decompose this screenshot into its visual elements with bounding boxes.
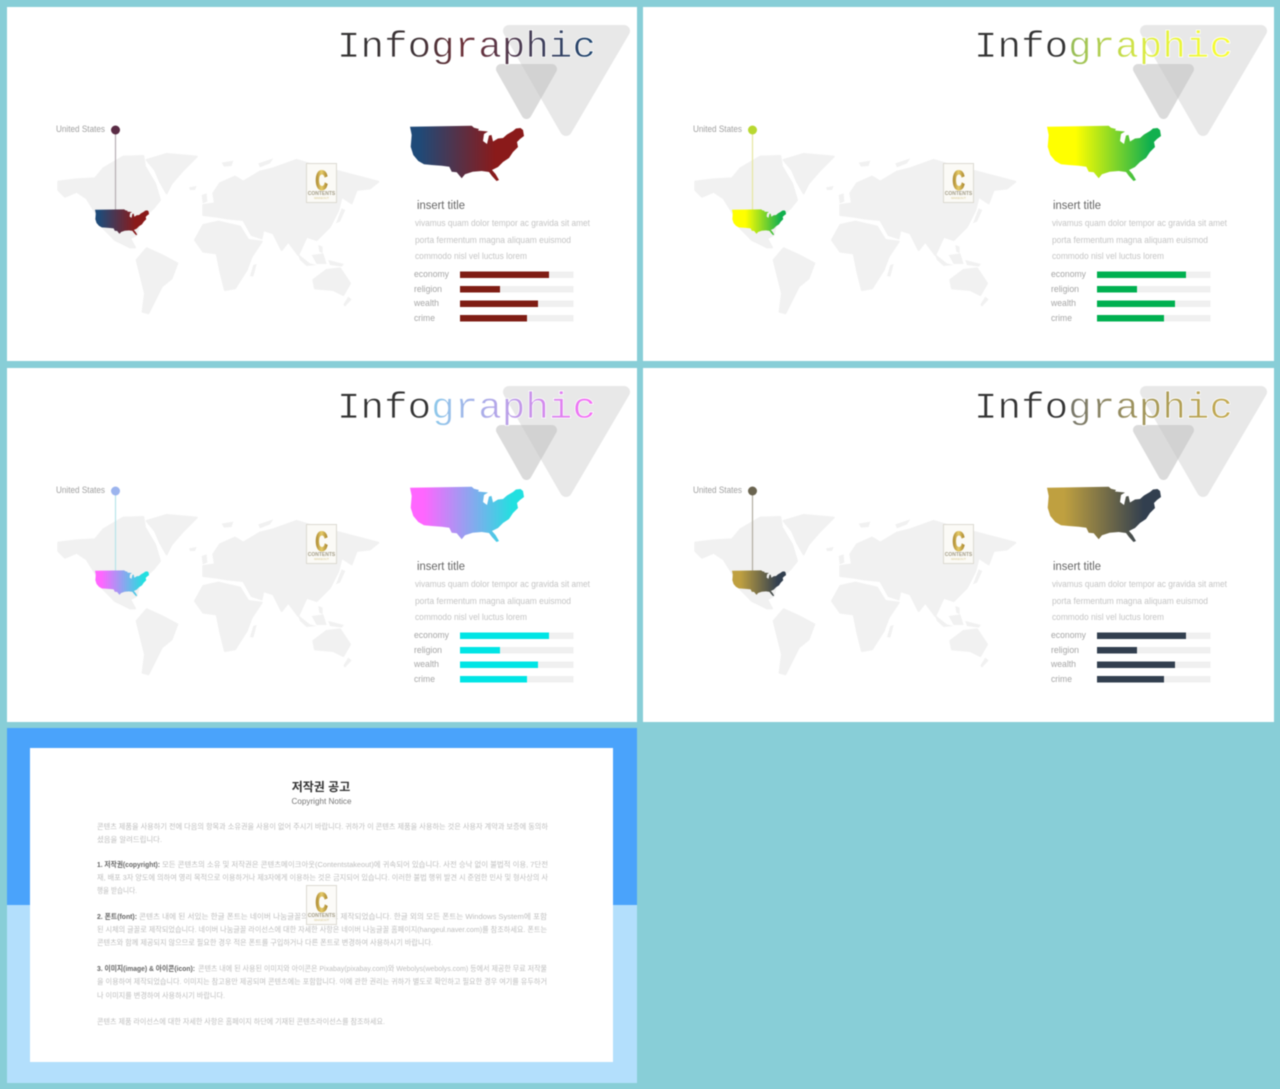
- bar chart: religion: [414, 284, 442, 295]
- subheading: Copyright Notice: [292, 796, 352, 806]
- bar chart: economy: [1051, 630, 1086, 641]
- bar chart: [413, 630, 574, 685]
- small US map: [732, 570, 786, 596]
- text block: vivamus quam dolor tempor ac gravida sit amet: [1052, 579, 1227, 590]
- bar chart: wealth: [1050, 659, 1076, 670]
- bar chart: economy: [414, 630, 449, 641]
- logo: [306, 164, 336, 202]
- world map: [695, 515, 1015, 674]
- text block: insert title: [417, 200, 465, 212]
- bar chart: wealth: [1050, 298, 1076, 309]
- map pin: United States: [693, 124, 757, 210]
- text block: insert title: [1053, 200, 1101, 212]
- text block: porta fermentum magna aliquam euismod: [415, 596, 571, 607]
- bar chart: [413, 269, 574, 324]
- panel: infographic pink-cyan: [7, 368, 637, 722]
- logo: C: [315, 526, 328, 557]
- decorative triangles: [1138, 31, 1261, 130]
- logo: C: [315, 887, 328, 918]
- small US map: [95, 570, 149, 596]
- map pin: United States: [56, 124, 120, 210]
- bar chart: economy: [1051, 269, 1086, 280]
- decorative triangles: [1138, 392, 1261, 491]
- small US map: [732, 209, 786, 235]
- large US map: [1047, 487, 1161, 542]
- logo: C: [952, 526, 965, 557]
- logo: [944, 164, 974, 202]
- map pin: United States: United States: [693, 124, 742, 135]
- title: Infographic: [337, 27, 596, 69]
- section 2: font: 콘텐츠 내에 된 서있는 한글 폰트는 네이버 나눔글꼴의 저작물로 제작되었습니다. 한글 외의 모든 폰트는 Windows System에 포함: [139, 911, 547, 921]
- text block: insert title: [1053, 561, 1101, 573]
- bar chart: wealth: [413, 659, 439, 670]
- bar chart: religion: [1051, 645, 1079, 656]
- text block: [1052, 561, 1227, 623]
- intro paragraph: [97, 821, 548, 844]
- text block: porta fermentum magna aliquam euismod: [415, 235, 571, 246]
- text block: vivamus quam dolor tempor ac gravida sit amet: [415, 579, 590, 590]
- text block: [415, 561, 590, 623]
- section 3: image and icon: 을 이용하여 제작되었습니다. 이미지는 참고용만 제공되며 콘텐츠에는 포함합니다. 이에 관한 권리는 귀하가 별도로 확인하고 필요한 경우 여기를 유두하거: [97, 976, 547, 986]
- panel: copyright notice: [7, 728, 637, 1083]
- text block: vivamus quam dolor tempor ac gravida sit amet: [1052, 218, 1227, 229]
- bar chart: religion: [414, 645, 442, 656]
- logo: MAKEOUT: [314, 196, 329, 200]
- logo: MAKEOUT: [314, 557, 329, 561]
- text block: commodo nisl vel luctus lorem: [1052, 251, 1164, 262]
- text block: vivamus quam dolor tempor ac gravida sit amet: [415, 218, 590, 229]
- logo: C: [315, 165, 328, 196]
- intro paragraph: 콘텐츠 제품을 사용하기 전에 다음의 항목과 소유권을 사용이 없어 주시기 바랍니다. 귀하가 이 콘텐츠 제품을 사용하는 것은 사용자 계약과 보증에 동의하: [97, 821, 548, 831]
- text block: porta fermentum magna aliquam euismod: [1052, 235, 1208, 246]
- section 1: copyright: 행을 받습니다.: [97, 885, 137, 895]
- section 3: image and icon: [97, 963, 547, 1000]
- heading: 저작권 공고: [292, 779, 350, 794]
- logo: CONTENTS: [308, 913, 336, 919]
- logo: [306, 886, 336, 924]
- bar chart: crime: [1051, 674, 1072, 685]
- logo: MAKEOUT: [951, 557, 966, 561]
- bar chart: crime: [414, 674, 435, 685]
- intro paragraph: 셨음을 알려드립니다.: [97, 834, 162, 844]
- closing note: 콘텐츠 제품 라이선스에 대한 자세한 사항은 홈페이지 하단에 기재된 콘텐츠라이선스를 참조하세요.: [97, 1016, 385, 1026]
- world map: [58, 515, 378, 674]
- bar chart: crime: [414, 313, 435, 324]
- panel: infographic gold-slate: [643, 368, 1274, 722]
- text block: commodo nisl vel luctus lorem: [1052, 612, 1164, 623]
- logo: CONTENTS: [945, 191, 973, 197]
- section 2: font: [97, 911, 547, 947]
- large US map: [410, 126, 524, 181]
- section 3: image and icon: 나 이미지를 변경하여 사용하시기 바랍니다.: [97, 990, 225, 1000]
- section 1: copyright: 재, 배포 3자 양도에 의하여 영리 목적으로 이용하거나 제3자에게 이용하는 것은 금지되어 있습니다. 이러한 불법 행위 발견 시 준엄한 민사 및 형사상의 사: [97, 872, 548, 882]
- section 1: copyright: 1. 저작권(copyright):: [97, 859, 160, 869]
- section 2: font: 2. 폰트(font):: [97, 912, 137, 921]
- map pin: United States: [56, 485, 120, 571]
- world map: [58, 154, 378, 313]
- world map: [695, 154, 1015, 313]
- bar chart: wealth: [413, 298, 439, 309]
- text block: porta fermentum magna aliquam euismod: [1052, 596, 1208, 607]
- panel: infographic yellow-green: [643, 7, 1274, 361]
- section 1: copyright: 모든 콘텐츠의 소유 및 저작권은 콘텐츠메이크아웃(Contentstakeout)에 귀속되어 있습니다. 사전 승낙 없이 불법적 이용, 7단전: [162, 859, 548, 869]
- text block: commodo nisl vel luctus lorem: [415, 251, 527, 262]
- text block: [1052, 200, 1227, 262]
- logo: [306, 524, 336, 564]
- section 2: font: 된 시체의 글꼴로 제작되었습니다. 네이버 나눔글꼴 라이선스에 대한 자세한 사항은 네이버 나눔글꼴 홈페이지(hangeul.naver.com)를 참조하세요. 폰트는: [97, 924, 547, 934]
- logo: CONTENTS: [308, 552, 336, 558]
- title: Infographic: [974, 388, 1233, 430]
- section 3: image and icon: 콘텐츠 내에 된 사용된 이미지와 아이콘은 Pixabay(pixabay.com)와 Webolys(webolys.com) 등에서 제공한 무료 저작물: [198, 963, 547, 973]
- map pin: United States: United States: [693, 485, 742, 496]
- bar chart: religion: [1051, 284, 1079, 295]
- logo: CONTENTS: [308, 191, 336, 197]
- logo: MAKEOUT: [314, 918, 329, 922]
- panel: infographic navy-red: [7, 7, 637, 361]
- bar chart: crime: [1051, 313, 1072, 324]
- logo: [944, 524, 974, 564]
- map pin: United States: [693, 485, 757, 571]
- logo: CONTENTS: [945, 552, 973, 558]
- bar chart: [1050, 630, 1210, 685]
- large US map: [1047, 126, 1161, 181]
- text block: commodo nisl vel luctus lorem: [415, 612, 527, 623]
- logo: C: [952, 165, 965, 196]
- decorative triangles: [501, 392, 624, 491]
- title: Infographic: [337, 388, 596, 430]
- map pin: United States: United States: [56, 485, 105, 496]
- bar chart: economy: [414, 269, 449, 280]
- logo: MAKEOUT: [951, 196, 966, 200]
- large US map: [410, 487, 524, 542]
- decorative triangles: [501, 31, 624, 130]
- small US map: [95, 209, 149, 235]
- map pin: United States: United States: [56, 124, 105, 135]
- bar chart: [1050, 269, 1210, 324]
- section 2: font: 콘텐츠와 함께 제공되지 않으므로 필요한 경우 적은 폰트를 구입하거나 다른 폰트로 변경하여 사용하시기 바랍니다.: [97, 937, 433, 947]
- section 1: copyright: [97, 859, 548, 895]
- text block: [415, 200, 590, 262]
- title: Infographic: [974, 27, 1233, 69]
- text block: insert title: [417, 561, 465, 573]
- section 3: image and icon: 3. 이미지(image) & 아이콘(icon):: [97, 963, 195, 973]
